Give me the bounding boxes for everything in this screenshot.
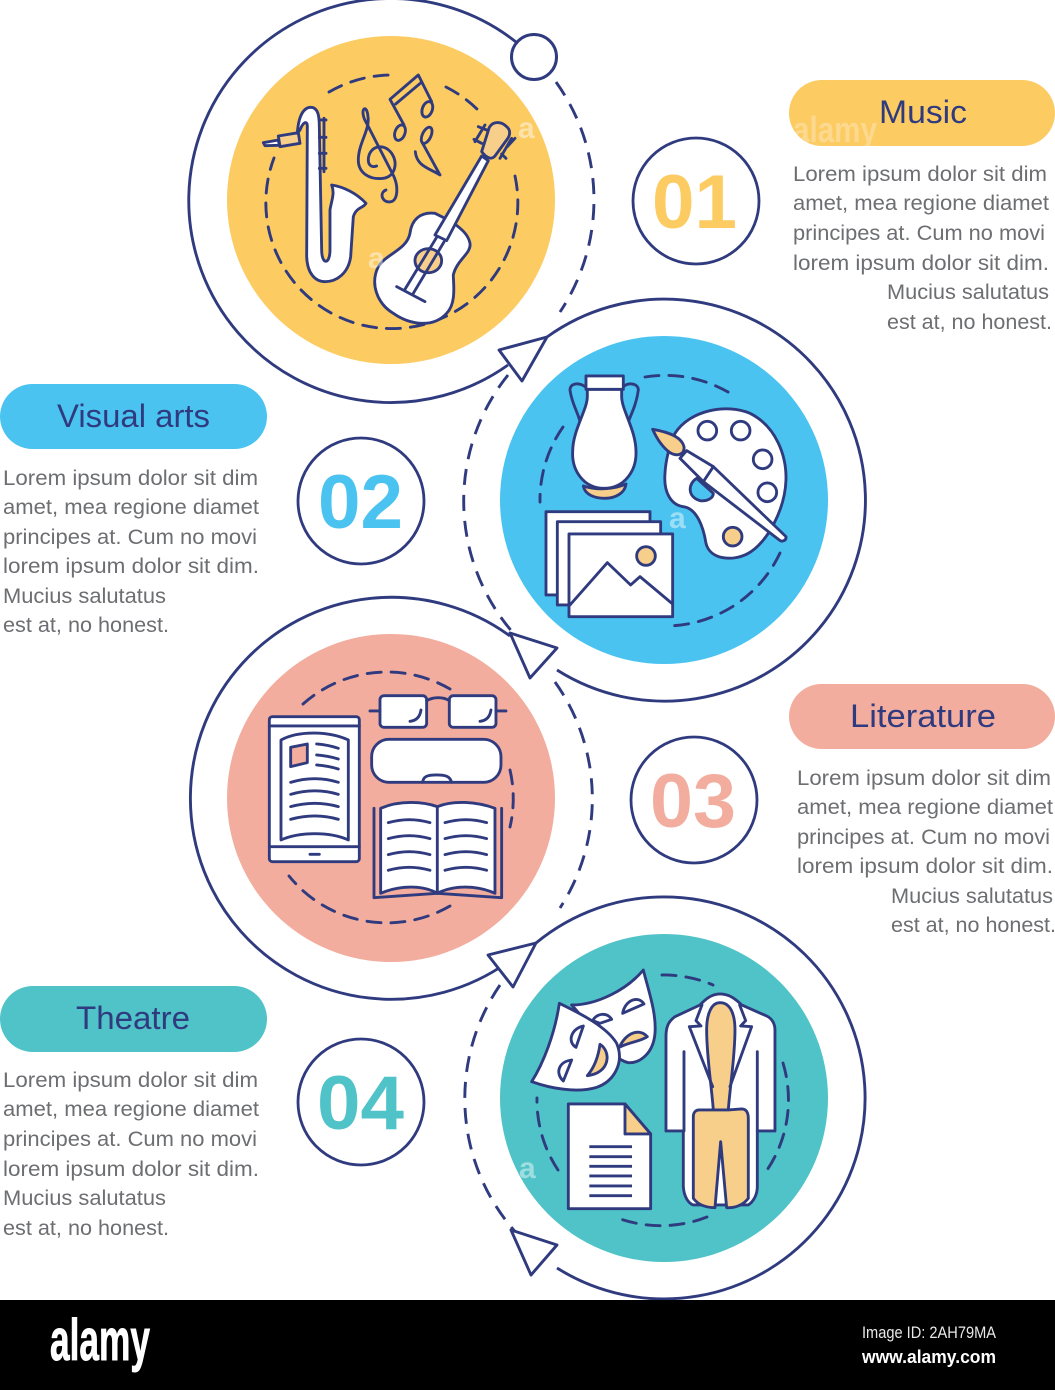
text block: visual arts: amet, mea regione diamet	[3, 495, 259, 519]
icon: theatre masks	[532, 970, 655, 1090]
heading: literature	[789, 684, 1055, 749]
heading: theatre	[0, 986, 267, 1052]
icon: costume suit	[666, 994, 775, 1208]
arrow 2	[510, 633, 557, 678]
icon: tablet	[269, 717, 359, 862]
number badge 01	[633, 138, 759, 264]
number badge 01: 01	[652, 160, 737, 245]
icon: saxophone	[263, 107, 366, 282]
heading: music	[789, 80, 1055, 150]
heading: music: alamy	[793, 109, 877, 150]
text block: theatre	[3, 1068, 259, 1240]
footer bar	[0, 1300, 1055, 1390]
theatre colored disc	[500, 934, 828, 1262]
watermark letters	[368, 112, 686, 1185]
text block: music: Lorem ipsum dolor sit dim	[793, 162, 1047, 186]
icon: picture stack	[546, 512, 673, 617]
text block: literature: principes at. Cum no movi	[797, 825, 1050, 849]
ring 3 dashed part	[555, 682, 592, 908]
arrow 3	[488, 943, 536, 987]
text block: theatre: lorem ipsum dolor sit dim.	[3, 1157, 259, 1181]
panel: literature	[227, 634, 555, 962]
watermark letters: a	[669, 502, 686, 535]
text block: music: principes at. Cum no movi	[793, 221, 1045, 245]
cycle connector rings and arrows	[189, 0, 865, 1299]
icon: open book	[374, 802, 502, 898]
ring 4 dashed part	[465, 985, 520, 1237]
panel: theatre	[500, 934, 828, 1262]
icon: glasses case	[372, 739, 501, 782]
number badge 02	[298, 438, 424, 564]
icon: music notes	[390, 75, 440, 175]
text block: music: amet, mea regione diamet	[793, 191, 1049, 215]
watermark letters: a	[519, 1152, 536, 1185]
visual arts colored disc	[500, 336, 828, 664]
text block: visual arts	[3, 466, 259, 637]
text block: literature	[797, 766, 1055, 937]
text block: visual arts: Mucius salutatus	[3, 584, 166, 608]
visual arts dashed inner ring	[540, 375, 780, 626]
icon: treble clef	[358, 109, 397, 202]
text block: theatre: Lorem ipsum dolor sit dim	[3, 1068, 258, 1092]
text block: literature: lorem ipsum dolor sit dim.	[797, 854, 1053, 878]
ring 1	[189, 0, 516, 402]
icon: script page	[568, 1104, 651, 1209]
ring 2 dashed part	[464, 375, 515, 635]
theatre dashed inner ring	[537, 975, 788, 1226]
footer bar: www.alamy.com	[861, 1347, 996, 1367]
text block: literature: est at, no honest.	[891, 913, 1055, 937]
text block: theatre: est at, no honest.	[3, 1216, 169, 1240]
panel: music	[227, 36, 555, 364]
arrow 4	[511, 1230, 557, 1275]
footer bar: alamy	[50, 1308, 150, 1373]
arrow 1	[499, 337, 547, 381]
text block: theatre: amet, mea regione diamet	[3, 1097, 259, 1121]
text block: music: lorem ipsum dolor sit dim.	[793, 251, 1049, 275]
text block: theatre: principes at. Cum no movi	[3, 1127, 257, 1151]
watermark letters: a	[368, 242, 385, 275]
number badge 04: 04	[317, 1061, 404, 1146]
heading: literature: Literature	[850, 698, 996, 734]
text block: music: est at, no honest.	[887, 310, 1052, 334]
heading: visual arts: Visual arts	[57, 398, 210, 434]
music dashed inner ring	[266, 75, 518, 329]
watermark letters: a	[518, 112, 535, 145]
ring 2	[547, 299, 865, 701]
icon: vase	[570, 376, 638, 498]
heading: music: Music	[879, 94, 967, 130]
footer bar: Image ID: 2AH79MA	[862, 1323, 997, 1342]
number badge 04	[298, 1039, 424, 1165]
music colored disc	[227, 36, 555, 364]
text block: theatre: Mucius salutatus	[3, 1186, 166, 1210]
ring 1 dashed part	[556, 82, 594, 312]
text block: visual arts: Lorem ipsum dolor sit dim	[3, 466, 258, 490]
number badge 03	[631, 737, 757, 863]
number badge 02: 02	[318, 460, 403, 545]
icon: palette and brush	[653, 409, 786, 558]
text block: visual arts: lorem ipsum dolor sit dim.	[3, 554, 259, 578]
literature colored disc	[227, 634, 555, 962]
heading: theatre: Theatre	[76, 1000, 190, 1036]
number badge 03: 03	[650, 759, 736, 844]
start node circle	[512, 34, 556, 80]
text block: literature: Mucius salutatus	[891, 884, 1053, 908]
panel: visual arts	[500, 336, 828, 664]
text block: visual arts: principes at. Cum no movi	[3, 525, 257, 549]
heading: visual arts	[0, 384, 267, 449]
literature dashed inner ring	[289, 672, 513, 923]
text block: music: Mucius salutatus	[887, 280, 1049, 304]
ring 4	[536, 897, 865, 1299]
ring 3	[190, 597, 510, 999]
icon: glasses	[370, 696, 506, 727]
text block: literature: Lorem ipsum dolor sit dim	[797, 766, 1051, 790]
text block: literature: amet, mea regione diamet	[797, 795, 1053, 819]
icon: guitar	[375, 123, 515, 323]
text block: music	[793, 162, 1052, 334]
text block: visual arts: est at, no honest.	[3, 613, 169, 637]
